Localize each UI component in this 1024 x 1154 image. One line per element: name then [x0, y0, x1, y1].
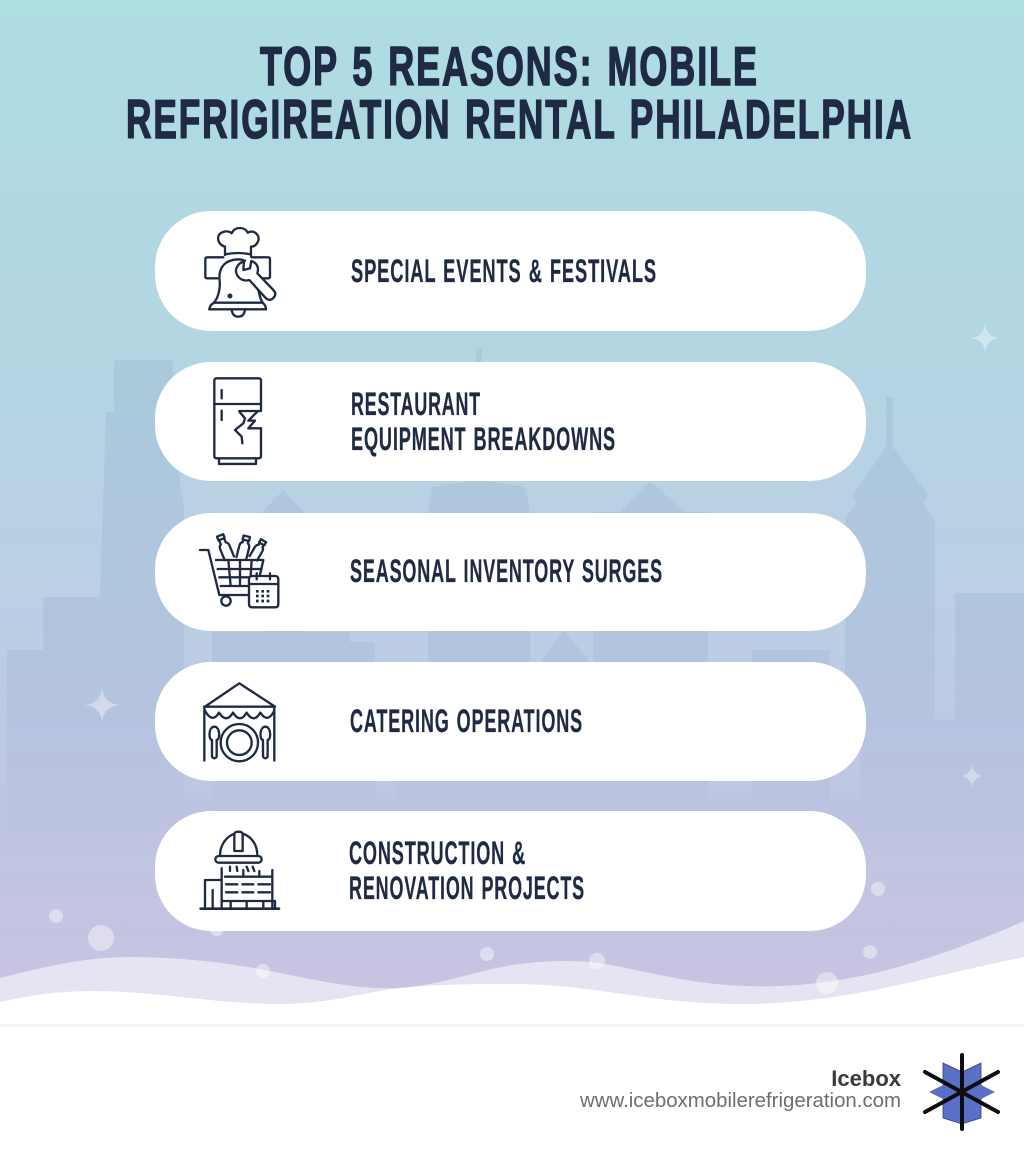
icon: shopping cart with bottles and calendar	[200, 534, 278, 607]
icon: catering tent with plate and utensils	[204, 683, 275, 761]
title: TOP 5 REASONS: MOBILE	[260, 35, 759, 97]
icon: hard hat above building under renovation	[201, 832, 279, 909]
label: CONSTRUCTION &	[349, 835, 526, 871]
back snow wave	[0, 921, 1024, 1030]
panel: restaurant equipment breakdowns	[155, 362, 866, 481]
footer brand text	[579, 1066, 902, 1112]
icon: Icebox snowflake logo	[925, 1055, 998, 1129]
panel: construction and renovation projects	[155, 811, 866, 931]
label: CATERING OPERATIONS	[350, 703, 583, 739]
title	[126, 35, 913, 150]
footer brand text: www.iceboxmobilerefrigeration.com	[579, 1090, 901, 1112]
label: SEASONAL INVENTORY SURGES	[350, 553, 663, 589]
footer divider	[0, 1024, 1024, 1027]
city skyline silhouette	[7, 348, 1024, 850]
label: SPECIAL EVENTS & FESTIVALS	[351, 253, 657, 289]
label: RENOVATION PROJECTS	[349, 870, 585, 906]
icon detail: right bottle	[250, 539, 267, 560]
panel: seasonal inventory surges	[155, 513, 866, 631]
icon: liberty bell with chef hat and wrench	[205, 228, 275, 317]
icon detail: left bottle	[215, 534, 234, 560]
label	[349, 835, 585, 906]
front snow wave	[0, 957, 1024, 1030]
panel: catering operations	[155, 662, 866, 781]
icon detail: middle bottle	[236, 535, 252, 560]
icon: cracked refrigerator	[214, 378, 261, 464]
panel: special events and festivals	[155, 211, 866, 331]
snow bubbles	[49, 882, 885, 994]
label: EQUIPMENT BREAKDOWNS	[351, 421, 616, 457]
sparkle: left	[84, 687, 121, 723]
sparkle: lower right	[960, 764, 984, 788]
label	[351, 386, 616, 457]
sparkle: upper right	[970, 323, 1000, 353]
label: RESTAURANT	[351, 386, 481, 422]
footer brand text: Icebox	[831, 1066, 902, 1091]
